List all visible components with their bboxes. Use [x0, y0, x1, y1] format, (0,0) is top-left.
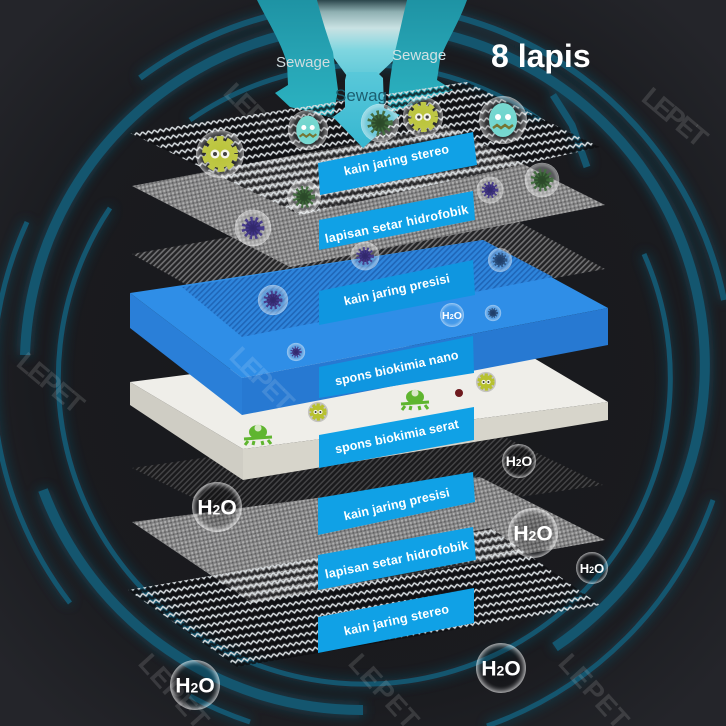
watermarks: LEPET: LEPET [636, 82, 714, 154]
microbe: teal large [479, 96, 527, 144]
bubble: H2O right: H2O [513, 522, 553, 546]
microbe: green bug right [401, 390, 429, 410]
microbe: purple left [235, 210, 271, 246]
label: kain jaring presisi: kain jaring presisi [343, 271, 451, 308]
microbe: yellow large [196, 130, 244, 178]
arrow: sewage right [387, 0, 467, 114]
microbe: yellow on white [308, 402, 328, 422]
microbe: purple small [477, 177, 503, 203]
microbes [196, 96, 559, 445]
label: lapisan setar hidrofobik lower: lapisan setar hidrofobik [324, 538, 470, 581]
bubble: H2O far right [576, 552, 608, 584]
layer 6: lower kain jaring presisi mesh [132, 420, 603, 533]
label: spons biokimia serat [319, 407, 474, 468]
label: spons biokimia nano: spons biokimia nano [334, 348, 460, 388]
bubble: H2O bottom left: H2O [175, 674, 215, 698]
layer 4: spons biokimia nano, blue block [130, 240, 608, 418]
microbe: red dot [455, 389, 463, 397]
layer 3: kain jaring presisi mesh [132, 195, 605, 330]
layer 7: lower lapisan setar hidrofobik [132, 477, 605, 603]
label: kain jaring presisi [319, 260, 475, 325]
microbe: navy small [485, 305, 501, 321]
label: kain jaring stereo lower [318, 588, 474, 653]
layer 2: lapisan setar hidrofobik [132, 126, 605, 267]
sewage labels: Sewage [276, 54, 330, 71]
watermarks: LEPET: LEPET [218, 77, 294, 154]
bubble: H2O bottom left [170, 660, 220, 710]
label: kain jaring stereo lower: kain jaring stereo [343, 602, 451, 638]
layer labels [318, 132, 477, 653]
bubble: H2O bottom right: H2O [481, 658, 521, 680]
bubble: H2O upper right [502, 444, 536, 478]
watermarks: LEPET: LEPET [11, 347, 91, 420]
microbe: teal left [288, 110, 328, 150]
microbe: navy right [488, 248, 512, 272]
bubble: H2O left: H2O [197, 496, 237, 520]
microbe: green top [361, 104, 399, 142]
microbe: purple on blue block [258, 285, 288, 315]
microbe: purple small on blue [287, 343, 305, 361]
arrow: sewage funnel glow [312, 0, 412, 76]
bubble: H2O left [192, 482, 242, 532]
sewage labels [276, 47, 446, 105]
bubble: H2O on blue block [440, 303, 464, 327]
layer 8: lower kain jaring stereo mesh [128, 528, 600, 667]
label: kain jaring presisi lower: kain jaring presisi [343, 485, 451, 523]
layer 1: kain jaring stereo mesh [130, 82, 600, 215]
label: spons biokimia serat: spons biokimia serat [334, 417, 461, 456]
label: lapisan setar hidrofobik lower [318, 527, 476, 590]
arrow: sewage centre [333, 72, 400, 148]
label: kain jaring presisi lower [318, 472, 475, 535]
title: 8 lapis: 8 lapis [491, 38, 591, 74]
bubble: H2O far right: H2O [580, 561, 604, 576]
label: spons biokimia nano [319, 336, 474, 398]
microbe: yellow on white right [476, 372, 496, 392]
label: kain jaring stereo [318, 132, 477, 195]
label: lapisan setar hidrofobik: lapisan setar hidrofobik [324, 202, 470, 246]
label: kain jaring stereo: kain jaring stereo [343, 142, 451, 178]
sewage labels: Sewag [335, 86, 387, 105]
label: lapisan setar hidrofobik [319, 191, 475, 250]
bubble: H2O upper right: H2O [506, 453, 532, 469]
microbe: yellow top [403, 97, 443, 137]
bubble: H2O on blue block: H2O [442, 310, 462, 322]
arrow: sewage left [257, 0, 338, 118]
microbe: green right [525, 163, 559, 197]
sewage labels: Sewage [392, 47, 446, 64]
microbe: green lower left [287, 180, 321, 214]
water bubbles [170, 303, 608, 710]
layer 5: spons biokimia serat, white block [130, 335, 608, 480]
microbe: purple centre [351, 242, 379, 270]
bubble: H2O right [508, 508, 558, 558]
bubble: H2O bottom right [476, 643, 526, 693]
microbe: green bug left [244, 424, 272, 445]
watermark on blue block: LEPET [224, 341, 300, 418]
